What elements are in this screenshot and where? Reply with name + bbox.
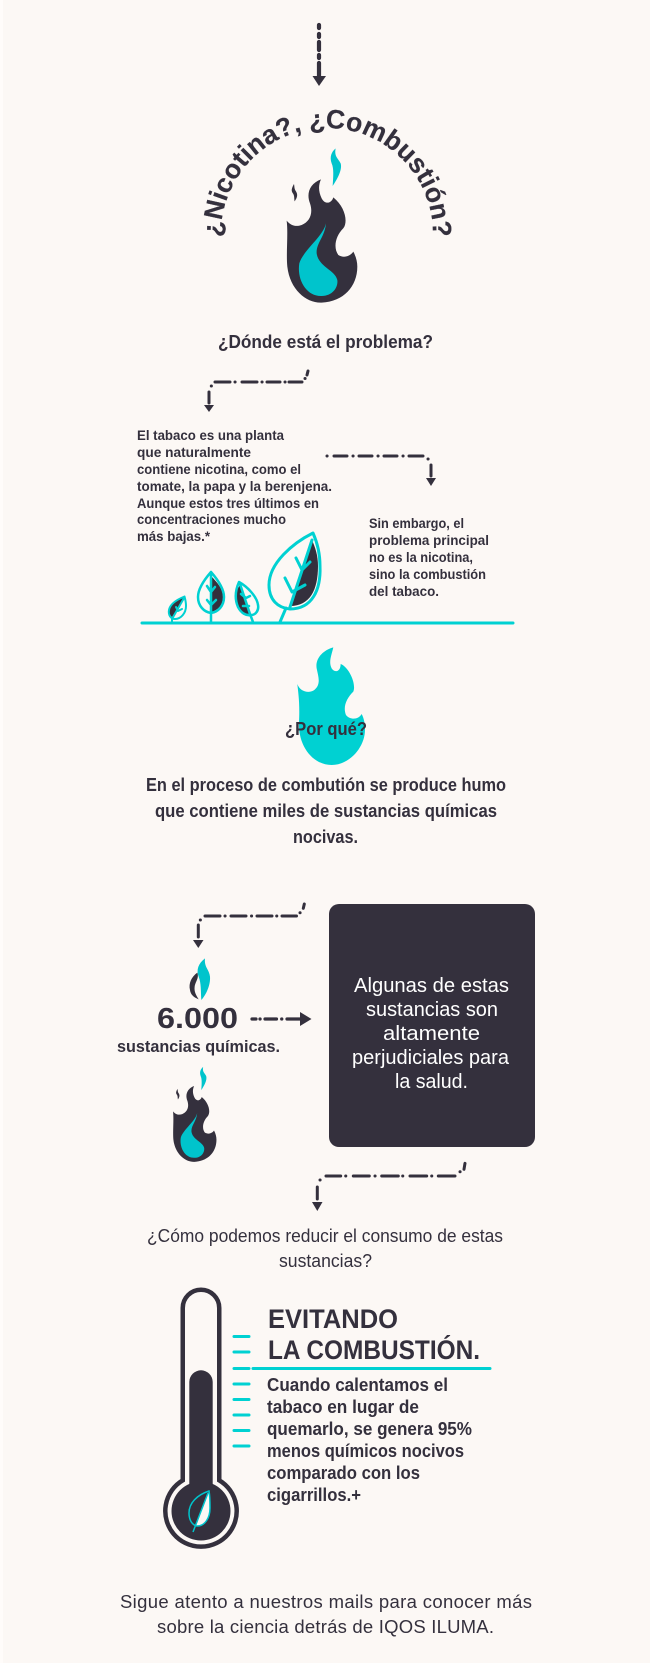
- text: combustion explanation: que contiene miles de sustancias químicas: [155, 801, 497, 821]
- text: tobacco plant: El tabaco es una planta: [137, 428, 284, 443]
- text: combustion is the problem: [369, 516, 489, 599]
- panel: harmful substances: Algunas de estas: [354, 975, 509, 997]
- stat: 6.000: 6.000: [157, 1003, 238, 1035]
- text: combustion is the problem: sino la combustión: [369, 567, 486, 582]
- arrow: bend to 6.000: [193, 904, 304, 948]
- footer text: [120, 1591, 532, 1637]
- scale ticks: [234, 1336, 249, 1446]
- heading: por que: ¿Por qué?: [285, 719, 367, 739]
- heading: evitando la combustion: EVITANDO: [268, 1304, 398, 1334]
- footer text: Sigue atento a nuestros mails para conocer más: [120, 1591, 532, 1612]
- text: how to reduce: sustancias?: [279, 1251, 372, 1271]
- panel: harmful substances: la salud.: [395, 1071, 468, 1093]
- text: tobacco plant: que naturalmente: [137, 445, 251, 460]
- heading: evitando la combustion: [268, 1304, 480, 1365]
- arrow: top down: [312, 25, 326, 86]
- icon: large cyan flame: [297, 647, 365, 765]
- panel: harmful substances: [329, 904, 535, 1147]
- panel: harmful substances: perjudiciales para: [352, 1047, 510, 1069]
- text: heating vs burning: quemarlo, se genera 95%: [267, 1419, 472, 1439]
- text: combustion explanation: nocivas.: [293, 827, 358, 847]
- icon: large dark flame: [287, 148, 357, 303]
- text: combustion explanation: En el proceso de combutión se produce humo: [146, 775, 506, 795]
- text: combustion explanation: [146, 775, 506, 847]
- text: combustion is the problem: problema principal: [369, 533, 489, 548]
- heading: evitando la combustion: LA COMBUSTIÓN.: [268, 1334, 480, 1365]
- label: sustancias quimicas: sustancias químicas.: [117, 1037, 280, 1056]
- text: heating vs burning: Cuando calentamos el: [267, 1375, 448, 1395]
- text: heating vs burning: tabaco en lugar de: [267, 1397, 419, 1417]
- text: heating vs burning: comparado con los: [267, 1463, 420, 1483]
- text: combustion is the problem: del tabaco.: [369, 584, 439, 599]
- heading underline: [253, 1367, 490, 1370]
- icon: smoke wisps: [190, 958, 210, 1000]
- text: heating vs burning: [267, 1375, 472, 1505]
- panel: harmful substances: altamente: [383, 1023, 480, 1045]
- arrow: bend to question: [312, 1163, 465, 1211]
- footer text: sobre la ciencia detrás de IQOS ILUMA.: [157, 1616, 494, 1637]
- arrow: to dark box: [252, 1012, 312, 1026]
- text: how to reduce: [147, 1226, 503, 1271]
- text: tobacco plant: contiene nicotina, como el: [137, 462, 301, 477]
- text: combustion is the problem: no es la nicotina,: [369, 550, 473, 565]
- text: combustion is the problem: Sin embargo, el: [369, 516, 464, 531]
- text: tobacco plant: más bajas.*: [137, 529, 211, 544]
- arrow: bend to combustion text: [327, 456, 436, 486]
- icon: small dark flame: [173, 1067, 216, 1162]
- text: tobacco plant: [137, 428, 332, 544]
- heading: donde esta el problema: ¿Dónde está el problema?: [218, 332, 433, 352]
- title: curved heading: ¿Nicotina?, ¿Combustión?: [204, 110, 452, 236]
- text: how to reduce: ¿Cómo podemos reducir el consumo de estas: [147, 1226, 503, 1246]
- text: tobacco plant: concentraciones mucho: [137, 512, 286, 527]
- panel: harmful substances: sustancias son: [366, 999, 498, 1021]
- icon: thermometer with leaf: [165, 1290, 237, 1547]
- text: tobacco plant: Aunque estos tres últimos en: [137, 496, 319, 511]
- text: tobacco plant: tomate, la papa y la berenjena.: [137, 479, 332, 494]
- arrow: bend to tobacco text: [204, 371, 308, 412]
- text: heating vs burning: cigarrillos.+: [267, 1485, 361, 1505]
- icon: growing leaves on ground line: [142, 533, 513, 623]
- text: heating vs burning: menos químicos nocivos: [267, 1441, 464, 1461]
